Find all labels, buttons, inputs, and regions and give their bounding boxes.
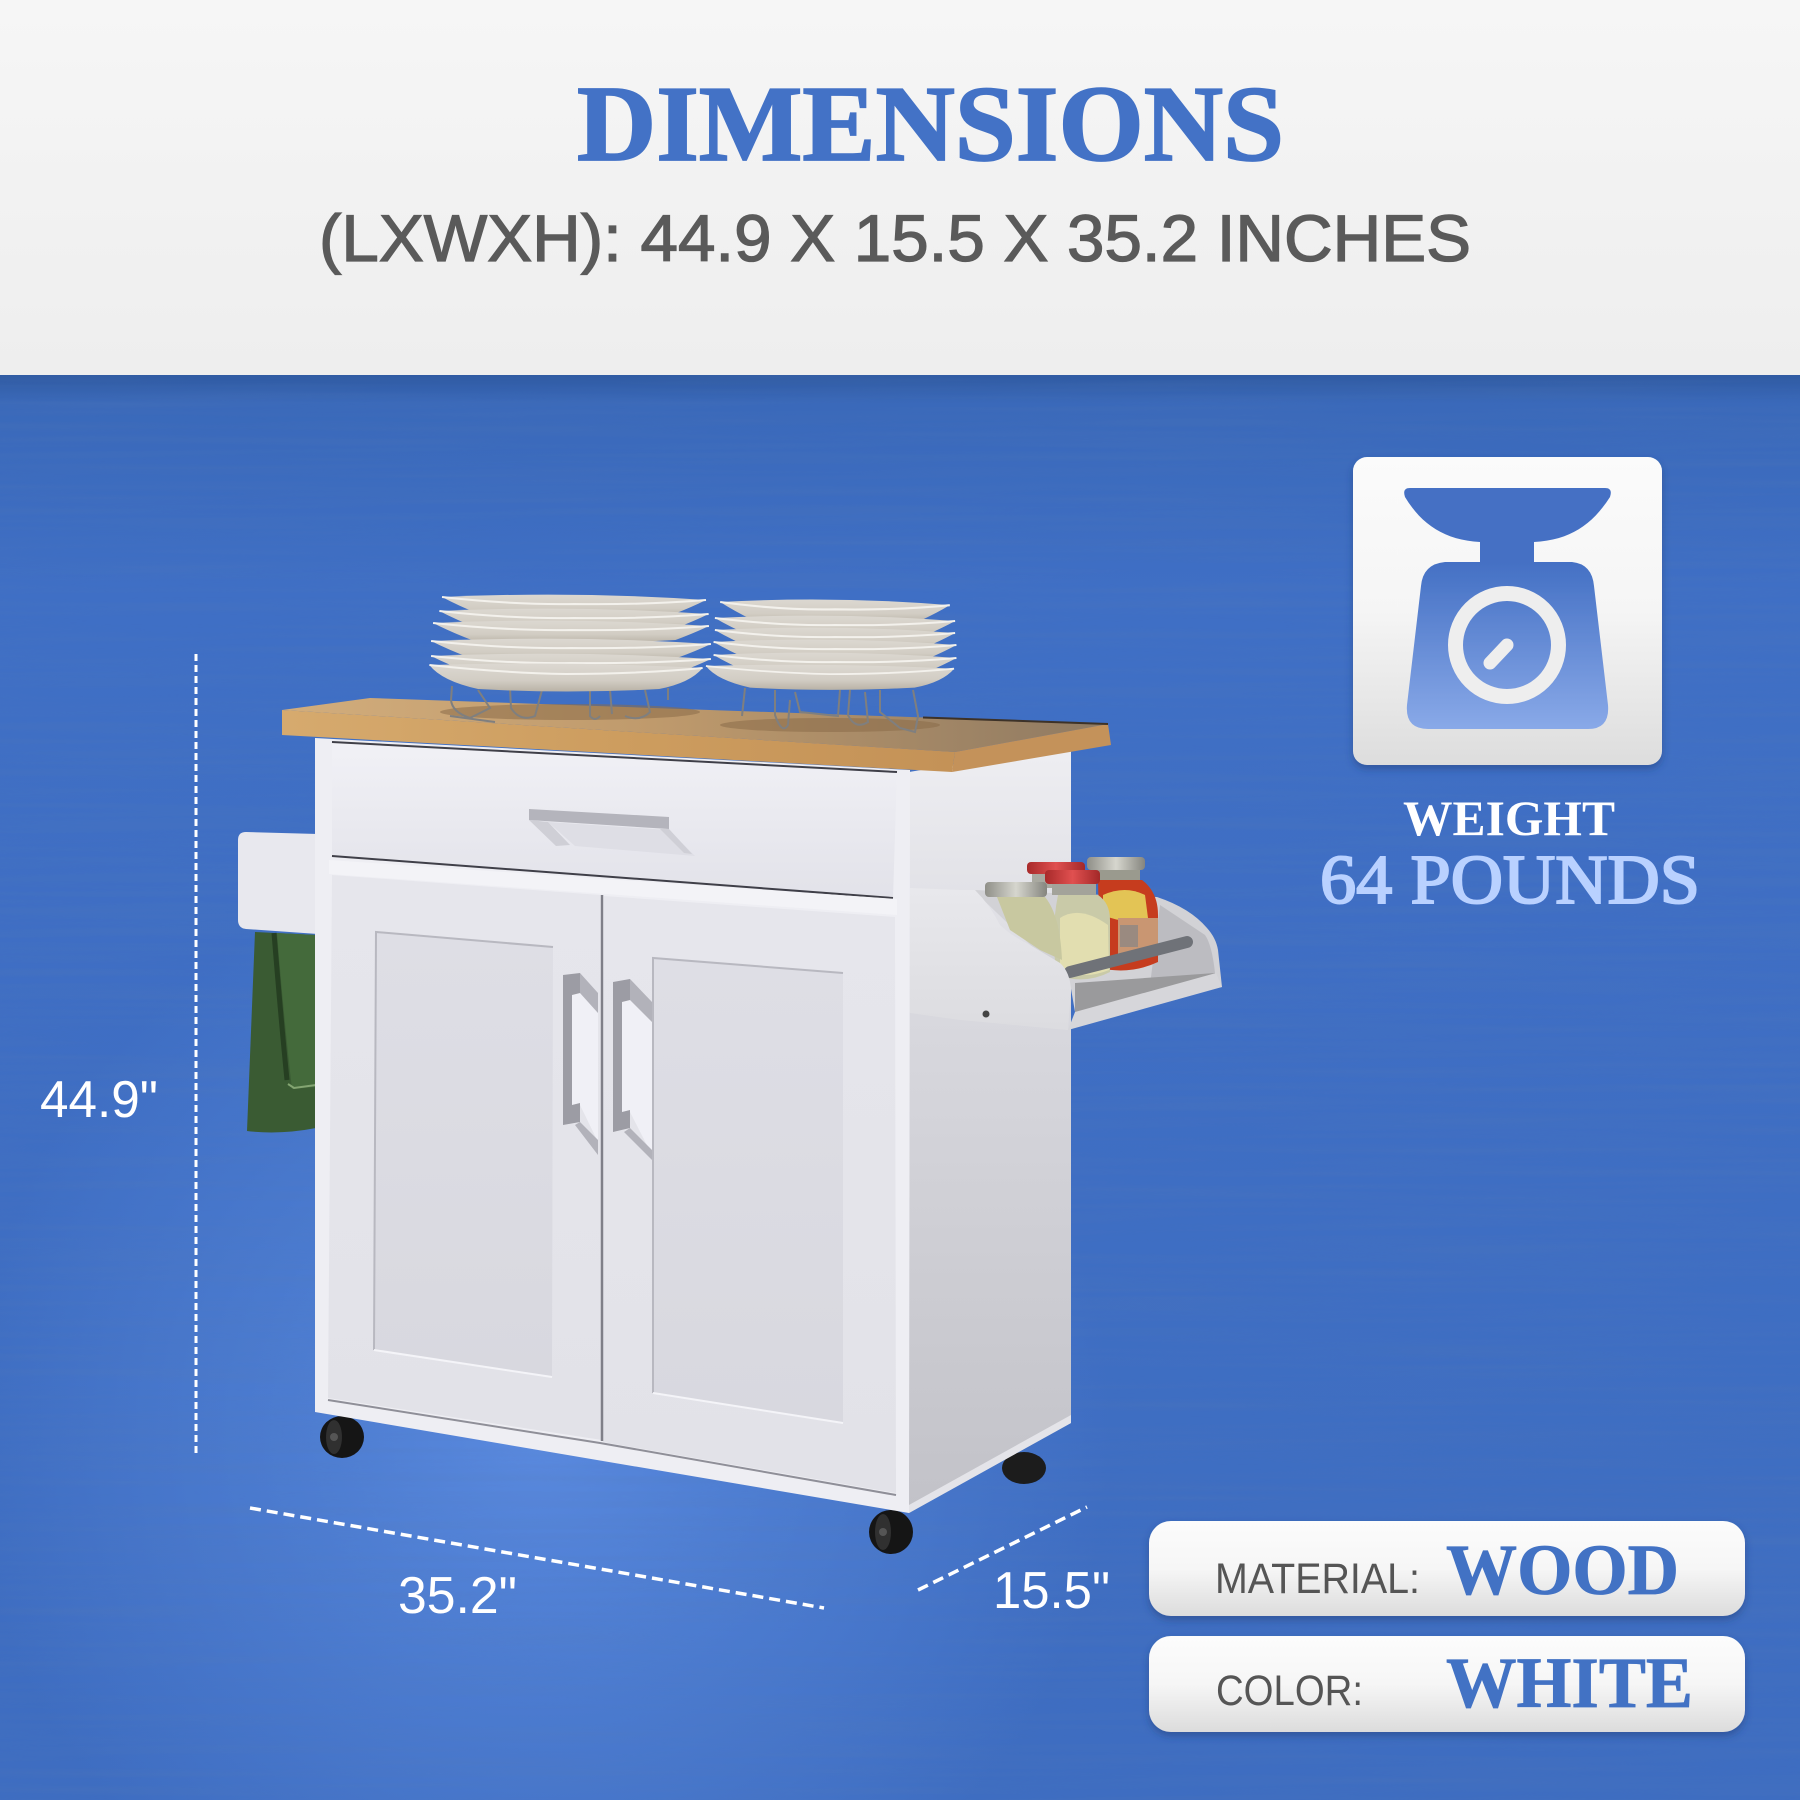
kitchen cart (238, 595, 1222, 1554)
color pill (1149, 1636, 1745, 1732)
jar: cream, red lid (1045, 870, 1110, 979)
width label: 35.2" (398, 1567, 517, 1625)
left door (328, 875, 602, 1440)
jar: left silver lid (985, 882, 1062, 960)
jar: back red lid (1027, 862, 1085, 888)
cabinet front frame (315, 738, 910, 1513)
material value: WOOD (1446, 1530, 1679, 1610)
plinth line (328, 1400, 896, 1495)
door gap (601, 895, 603, 1441)
jar: orange pickles (1087, 857, 1158, 970)
header band (0, 0, 1800, 375)
weight label: WEIGHT (1403, 790, 1615, 846)
rack back wall (973, 890, 1222, 1012)
spice rack (910, 857, 1222, 1030)
door handles (563, 973, 652, 1160)
material label: MATERIAL: (1215, 1555, 1420, 1603)
subtitle: (LXWXH): 44.9 X 15.5 X 35.2 INCHES (319, 201, 1471, 275)
blue background panel (0, 375, 1800, 1800)
title: DIMENSIONS (577, 65, 1284, 184)
depth label: 15.5" (993, 1562, 1110, 1620)
tray floor (1075, 973, 1218, 1014)
width dashed line (250, 1508, 824, 1608)
rack rail (1070, 942, 1187, 972)
towel bar panel (238, 832, 318, 934)
countertop (282, 698, 1111, 772)
plate stack right (706, 599, 956, 690)
height label: 44.9" (40, 1071, 158, 1129)
rail under drawer (329, 860, 897, 915)
green towel (247, 932, 316, 1132)
caster wheels (320, 1416, 1046, 1554)
drawer handle (529, 809, 695, 856)
color label: COLOR: (1216, 1667, 1363, 1715)
rack front lip (1068, 973, 1222, 1030)
weight card (1353, 457, 1662, 765)
cabinet side (909, 745, 1071, 1513)
rack side panel (910, 888, 1071, 1030)
weight value: 64 POUNDS (1320, 842, 1700, 919)
side bottom edge (909, 1415, 1071, 1513)
wire plate stands (450, 686, 918, 732)
drawer (332, 742, 897, 898)
material pill (1149, 1521, 1745, 1616)
depth dashed line (918, 1507, 1087, 1590)
screw (982, 1010, 990, 1018)
plate stack left (429, 595, 711, 692)
height dashed line (194, 654, 198, 1456)
jars (985, 857, 1158, 979)
icon: kitchen scale (1404, 488, 1611, 729)
right door (603, 896, 896, 1493)
color value: WHITE (1446, 1643, 1693, 1723)
